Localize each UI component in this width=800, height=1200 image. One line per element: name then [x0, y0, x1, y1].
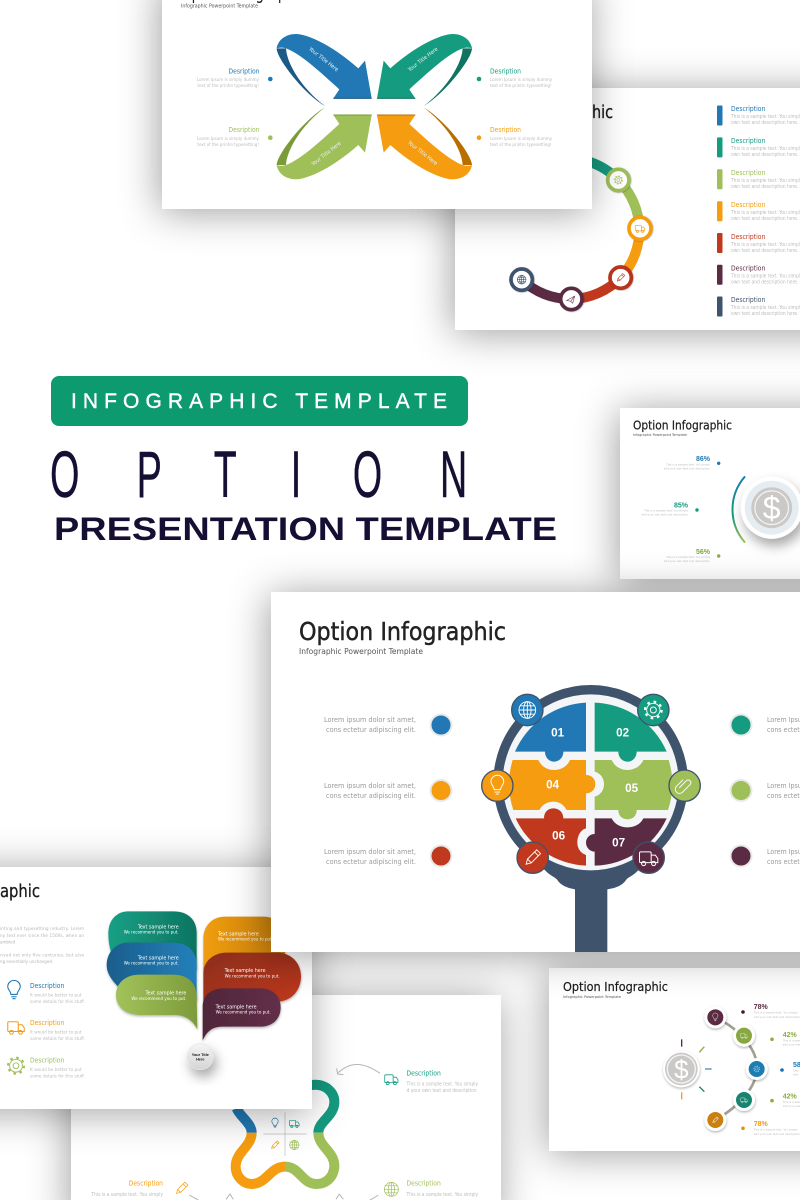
list: icon descriptions: some details for this stuff.	[30, 1074, 85, 1080]
diagram: converging arrows: Your Title Here	[406, 140, 438, 167]
diagram: speech bubbles: We recommend you to put.	[218, 937, 273, 943]
list: icon descriptions: It would be better to put	[30, 1067, 82, 1073]
text: intro paragraph fragments: rived not only five centuries, but also	[0, 952, 85, 958]
callouts: percentages: 86%	[696, 456, 711, 463]
callouts: hub percentages: This	[793, 1068, 799, 1072]
callouts: right descriptions: Desription	[490, 68, 521, 76]
callouts: left descriptions: text of the printin typesetting!	[197, 142, 259, 148]
callouts: hub percentages: 42%	[783, 1032, 797, 1039]
panel: speech bubbles slide	[0, 867, 312, 1109]
callouts: left items: Lorem ipsum dolor sit amet,	[324, 782, 416, 790]
title: OPTION: OPTION	[50, 438, 467, 512]
callouts: percentages: add your own text and description	[664, 466, 710, 470]
markers: left dots	[430, 714, 452, 866]
diagram: puzzle magnifying glass: 07	[612, 837, 625, 850]
callouts: percentages: 85%	[674, 502, 689, 510]
callouts: left descriptions: text of the printin typesetting!	[197, 83, 259, 89]
diagram: puzzle magnifying glass: 04	[546, 779, 560, 792]
callouts: right descriptions: Lorem Ipsum is simply dummy	[490, 77, 553, 83]
diagram: converging arrows: Your Title Here	[307, 46, 339, 73]
callouts: left items: cons ectetur adipiscing elit.	[326, 792, 416, 800]
icon: dollar coin: $	[763, 490, 781, 526]
badge: infographic template	[51, 376, 468, 426]
subtitle: presentation template: PRESENTATION TEMPLATE	[54, 511, 557, 547]
diagram: speech bubbles: Text sample here	[215, 1004, 257, 1010]
callout: globe description	[406, 1180, 478, 1198]
list: icon descriptions: Description	[30, 982, 64, 990]
panel: main puzzle magnifier slide	[271, 592, 800, 952]
list: icon descriptions: It would be better to put	[30, 1030, 82, 1036]
callouts: percentages	[642, 456, 711, 563]
diagram: puzzle magnifying glass	[482, 690, 700, 952]
list: icon descriptions: some details for this stuff.	[30, 999, 85, 1005]
callouts: left descriptions: Desription	[229, 68, 260, 76]
callouts: right descriptions: text of the printin typesetting!	[490, 142, 552, 148]
diagram: converging arrows: Your Title Here	[310, 141, 343, 168]
diagram: speech bubbles: Text sample here	[144, 991, 186, 997]
list: timeline descriptions: Description	[731, 169, 765, 177]
callout: globe description: This is a sample text. You simply	[406, 1192, 478, 1198]
diagram: dollar hub nodes: $	[674, 1054, 689, 1084]
callouts: hub percentages: add your own text and description	[754, 1015, 800, 1019]
diagram: puzzle magnifying glass: 06	[552, 829, 566, 842]
diagram: speech bubbles: We recommend you to put.	[124, 961, 179, 967]
text: intro paragraph fragments: ambled	[0, 940, 16, 946]
text: intro paragraph fragments	[0, 926, 85, 965]
heading: timeline slide title fragment: hic	[592, 102, 613, 123]
callout: pencil description	[90, 1180, 163, 1198]
list: timeline descriptions: Description	[731, 264, 765, 272]
list: timeline descriptions: Description	[731, 233, 765, 241]
list: timeline descriptions	[717, 105, 800, 317]
callouts: percentages: add your own text and description	[664, 559, 710, 563]
badge: your title here: Here	[196, 1058, 205, 1062]
callouts: right descriptions: Lorem Ipsum is simply dummy	[490, 136, 553, 142]
badge: your title here: Your Title	[192, 1053, 209, 1057]
callouts: left descriptions: Lorem Ipsum is simply dummy	[197, 136, 260, 142]
list: icon descriptions: some details for this stuff.	[30, 1036, 85, 1042]
callouts: hub percentages: 78%	[754, 1004, 768, 1011]
callouts: left items: cons ectetur adipiscing elit.	[326, 858, 416, 866]
badge: infographic template: INFOGRAPHIC TEMPLATE	[71, 390, 447, 413]
list: icon descriptions: It would be better to put	[30, 992, 82, 998]
callouts: left items: cons ectetur adipiscing elit.	[326, 726, 416, 734]
diagram: speech bubbles: Text sample here	[224, 968, 266, 974]
panel: percentage coin slide	[620, 408, 800, 579]
diagram: speech bubbles: Text sample here	[137, 924, 179, 930]
callouts: left items: Lorem ipsum dolor sit amet,	[324, 716, 416, 724]
chart: circular timeline	[511, 162, 651, 310]
heading: hub slide title: Option Infographic	[563, 979, 668, 994]
callouts: right descriptions: Desription	[490, 126, 521, 134]
callout: pencil description: This is a sample text. You simply	[90, 1192, 163, 1198]
callouts: percentages: This is a sample text. You simply	[666, 555, 710, 559]
callouts: left descriptions	[197, 68, 260, 148]
callouts: left items	[324, 716, 416, 866]
diagram: speech bubbles	[107, 911, 301, 1041]
callouts: percentages: 56%	[696, 549, 711, 556]
badge: your title here	[187, 1044, 213, 1070]
list: timeline descriptions: Description	[731, 105, 765, 113]
diagram: speech bubbles: We recommend you to put.	[225, 973, 280, 979]
diagram: converging arrows	[277, 34, 472, 179]
callout: truck description: Description	[406, 1070, 441, 1078]
panel: radial timeline slide	[455, 88, 800, 330]
callouts: left items: Lorem ipsum dolor sit amet,	[324, 848, 416, 856]
diagram: speech bubbles: We recommend you to put.	[131, 996, 186, 1002]
markers: right dots	[730, 714, 752, 866]
list: timeline descriptions: Description	[731, 201, 765, 209]
diagram: puzzle magnifying glass: 05	[625, 782, 639, 795]
text: hub slide subtitle: Infographic Powerpoint Template	[563, 995, 621, 999]
list: icon descriptions	[8, 980, 85, 1080]
callouts: percentages: This is a sample text. You simply	[666, 462, 710, 466]
icon: dollar coin	[741, 477, 800, 539]
diagram: dollar hub nodes	[663, 1006, 768, 1131]
callouts: right items	[767, 716, 800, 866]
text: main slide subtitle: Infographic Powerpoint Template	[299, 647, 423, 656]
callouts: hub percentages	[741, 1004, 800, 1136]
callouts: hub percentages: add your own text and description	[754, 1132, 800, 1136]
callout: pencil description: Description	[129, 1180, 163, 1188]
callout: truck description	[406, 1070, 478, 1094]
list: icon descriptions: Description	[30, 1019, 64, 1027]
diagram: clover loop	[175, 1064, 398, 1200]
diagram: converging arrows: Your Title Here	[407, 46, 439, 74]
callouts: percentages: This is a sample text. You simply	[644, 508, 688, 512]
diagram: speech bubbles: We recommend you to put.	[216, 1010, 271, 1016]
text: intro paragraph fragments: inting and typesetting industry. Lorem	[0, 926, 84, 932]
list: timeline descriptions: Description	[731, 296, 765, 304]
callout: truck description: d your own text and description	[406, 1088, 477, 1094]
heading: main slide title: Option Infographic	[299, 617, 506, 646]
text: intro paragraph fragments: ng essentially unchanged.	[0, 959, 53, 965]
diagram: puzzle magnifying glass: 02	[616, 727, 630, 740]
callouts: hub percentages: 42%	[783, 1094, 797, 1100]
diagram: puzzle magnifying glass: 01	[551, 727, 565, 740]
panel: clover flow slide	[71, 995, 501, 1200]
diagram: speech bubbles: We recommend you to put.	[124, 930, 179, 936]
callouts: hub percentages: This is a sample text. You simply	[754, 1010, 798, 1014]
diagram: speech bubbles: Text sample here	[217, 931, 259, 937]
callout: truck description: This is a sample text. You simply	[406, 1082, 478, 1088]
callouts: percentages: add your own text and description	[642, 512, 688, 516]
callouts: left descriptions: Lorem Ipsum is simply dummy	[197, 77, 260, 83]
callouts: left descriptions: Desription	[229, 126, 260, 134]
text: arrows slide subtitle: Infographic Powerpoint Template	[181, 4, 258, 10]
callouts: hub percentages: This is a sample text. You simply	[754, 1128, 798, 1132]
callouts: hub percentages: 78%	[754, 1121, 768, 1128]
text: coin slide subtitle: Infographic Powerpoint Template	[633, 433, 687, 437]
callouts: right descriptions	[490, 68, 553, 148]
chart: gradient arc	[732, 477, 744, 542]
heading: coin slide title: Option Infographic	[633, 418, 732, 432]
text: intro paragraph fragments: ny text ever since the 1500s, when an	[0, 933, 84, 939]
list: icon descriptions: Description	[30, 1056, 64, 1064]
panel: four arrows slide	[162, 0, 592, 209]
callouts: right descriptions: text of the printin typesetting!	[490, 83, 552, 89]
panel: dollar hub slide	[549, 968, 800, 1151]
callouts: hub percentages: add	[793, 1072, 798, 1076]
diagram: speech bubbles: Text sample here	[137, 956, 179, 962]
heading: bubbles slide title fragment: aphic	[0, 881, 40, 902]
callout: globe description: Description	[406, 1180, 441, 1188]
list: timeline descriptions: Description	[731, 137, 765, 145]
